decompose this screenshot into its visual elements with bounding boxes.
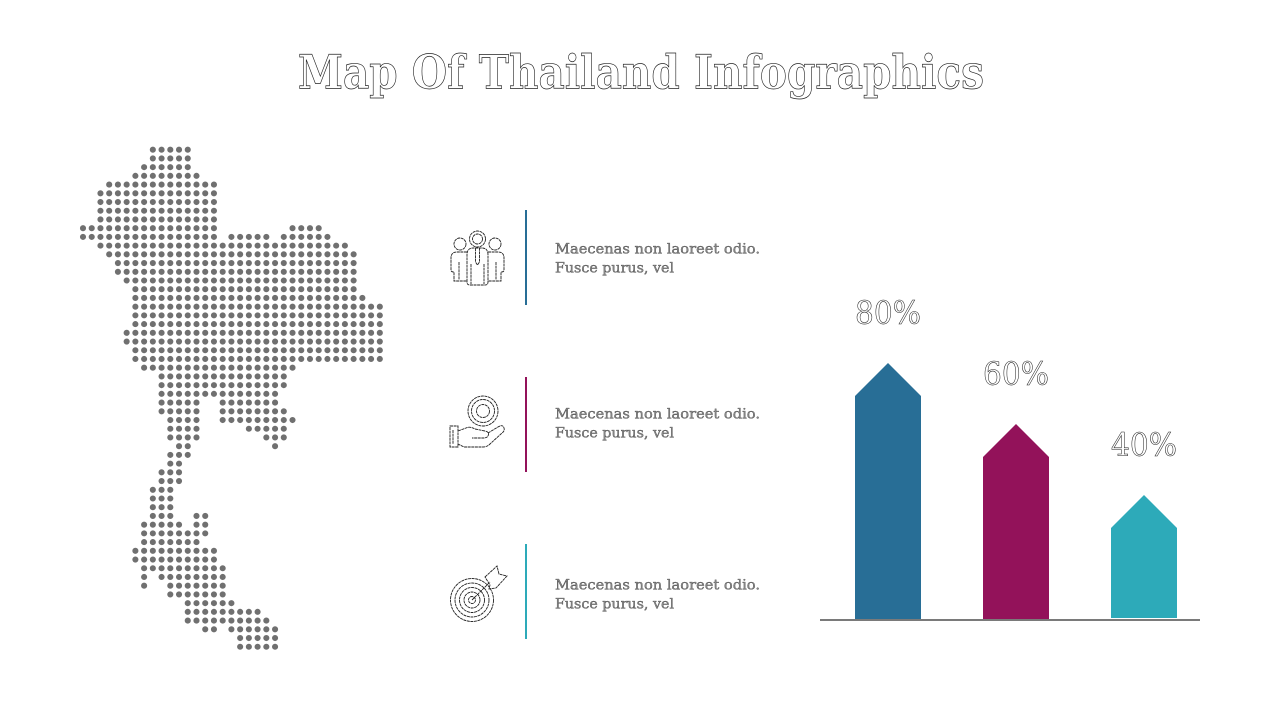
item 2: giving hand (450, 377, 760, 472)
label 40%: 40% (1111, 426, 1177, 464)
text block 1: Fusce purus, vel (555, 260, 675, 276)
divider line 2 (525, 377, 527, 472)
bar 40% (1111, 495, 1177, 618)
text block 2 (555, 406, 760, 442)
dotted map of Thailand (83, 150, 380, 647)
chart baseline (820, 619, 1200, 621)
label 60%: 60% (983, 355, 1049, 393)
bar 80% (855, 363, 921, 619)
icon: target with arrow (450, 566, 507, 622)
bar 60% (983, 424, 1049, 619)
text block 3: Maecenas non laoreet odio. (555, 578, 760, 594)
icon: hand holding coin (450, 396, 504, 447)
bar chart (820, 294, 1200, 621)
text block 3 (555, 578, 760, 612)
text block 2: Fusce purus, vel (555, 426, 675, 442)
text block 1: Maecenas non laoreet odio. (555, 242, 760, 258)
divider line 3 (525, 544, 527, 639)
divider line 1 (525, 210, 527, 305)
text block 2: Maecenas non laoreet odio. (555, 406, 760, 422)
text block 1 (555, 242, 760, 276)
item 1: team (451, 210, 760, 305)
label 80%: 80% (855, 294, 921, 332)
title: Map Of Thailand Infographics (298, 46, 984, 100)
text block 3: Fusce purus, vel (555, 596, 675, 612)
icon: team of people (451, 231, 504, 285)
item 3: target (450, 544, 760, 639)
